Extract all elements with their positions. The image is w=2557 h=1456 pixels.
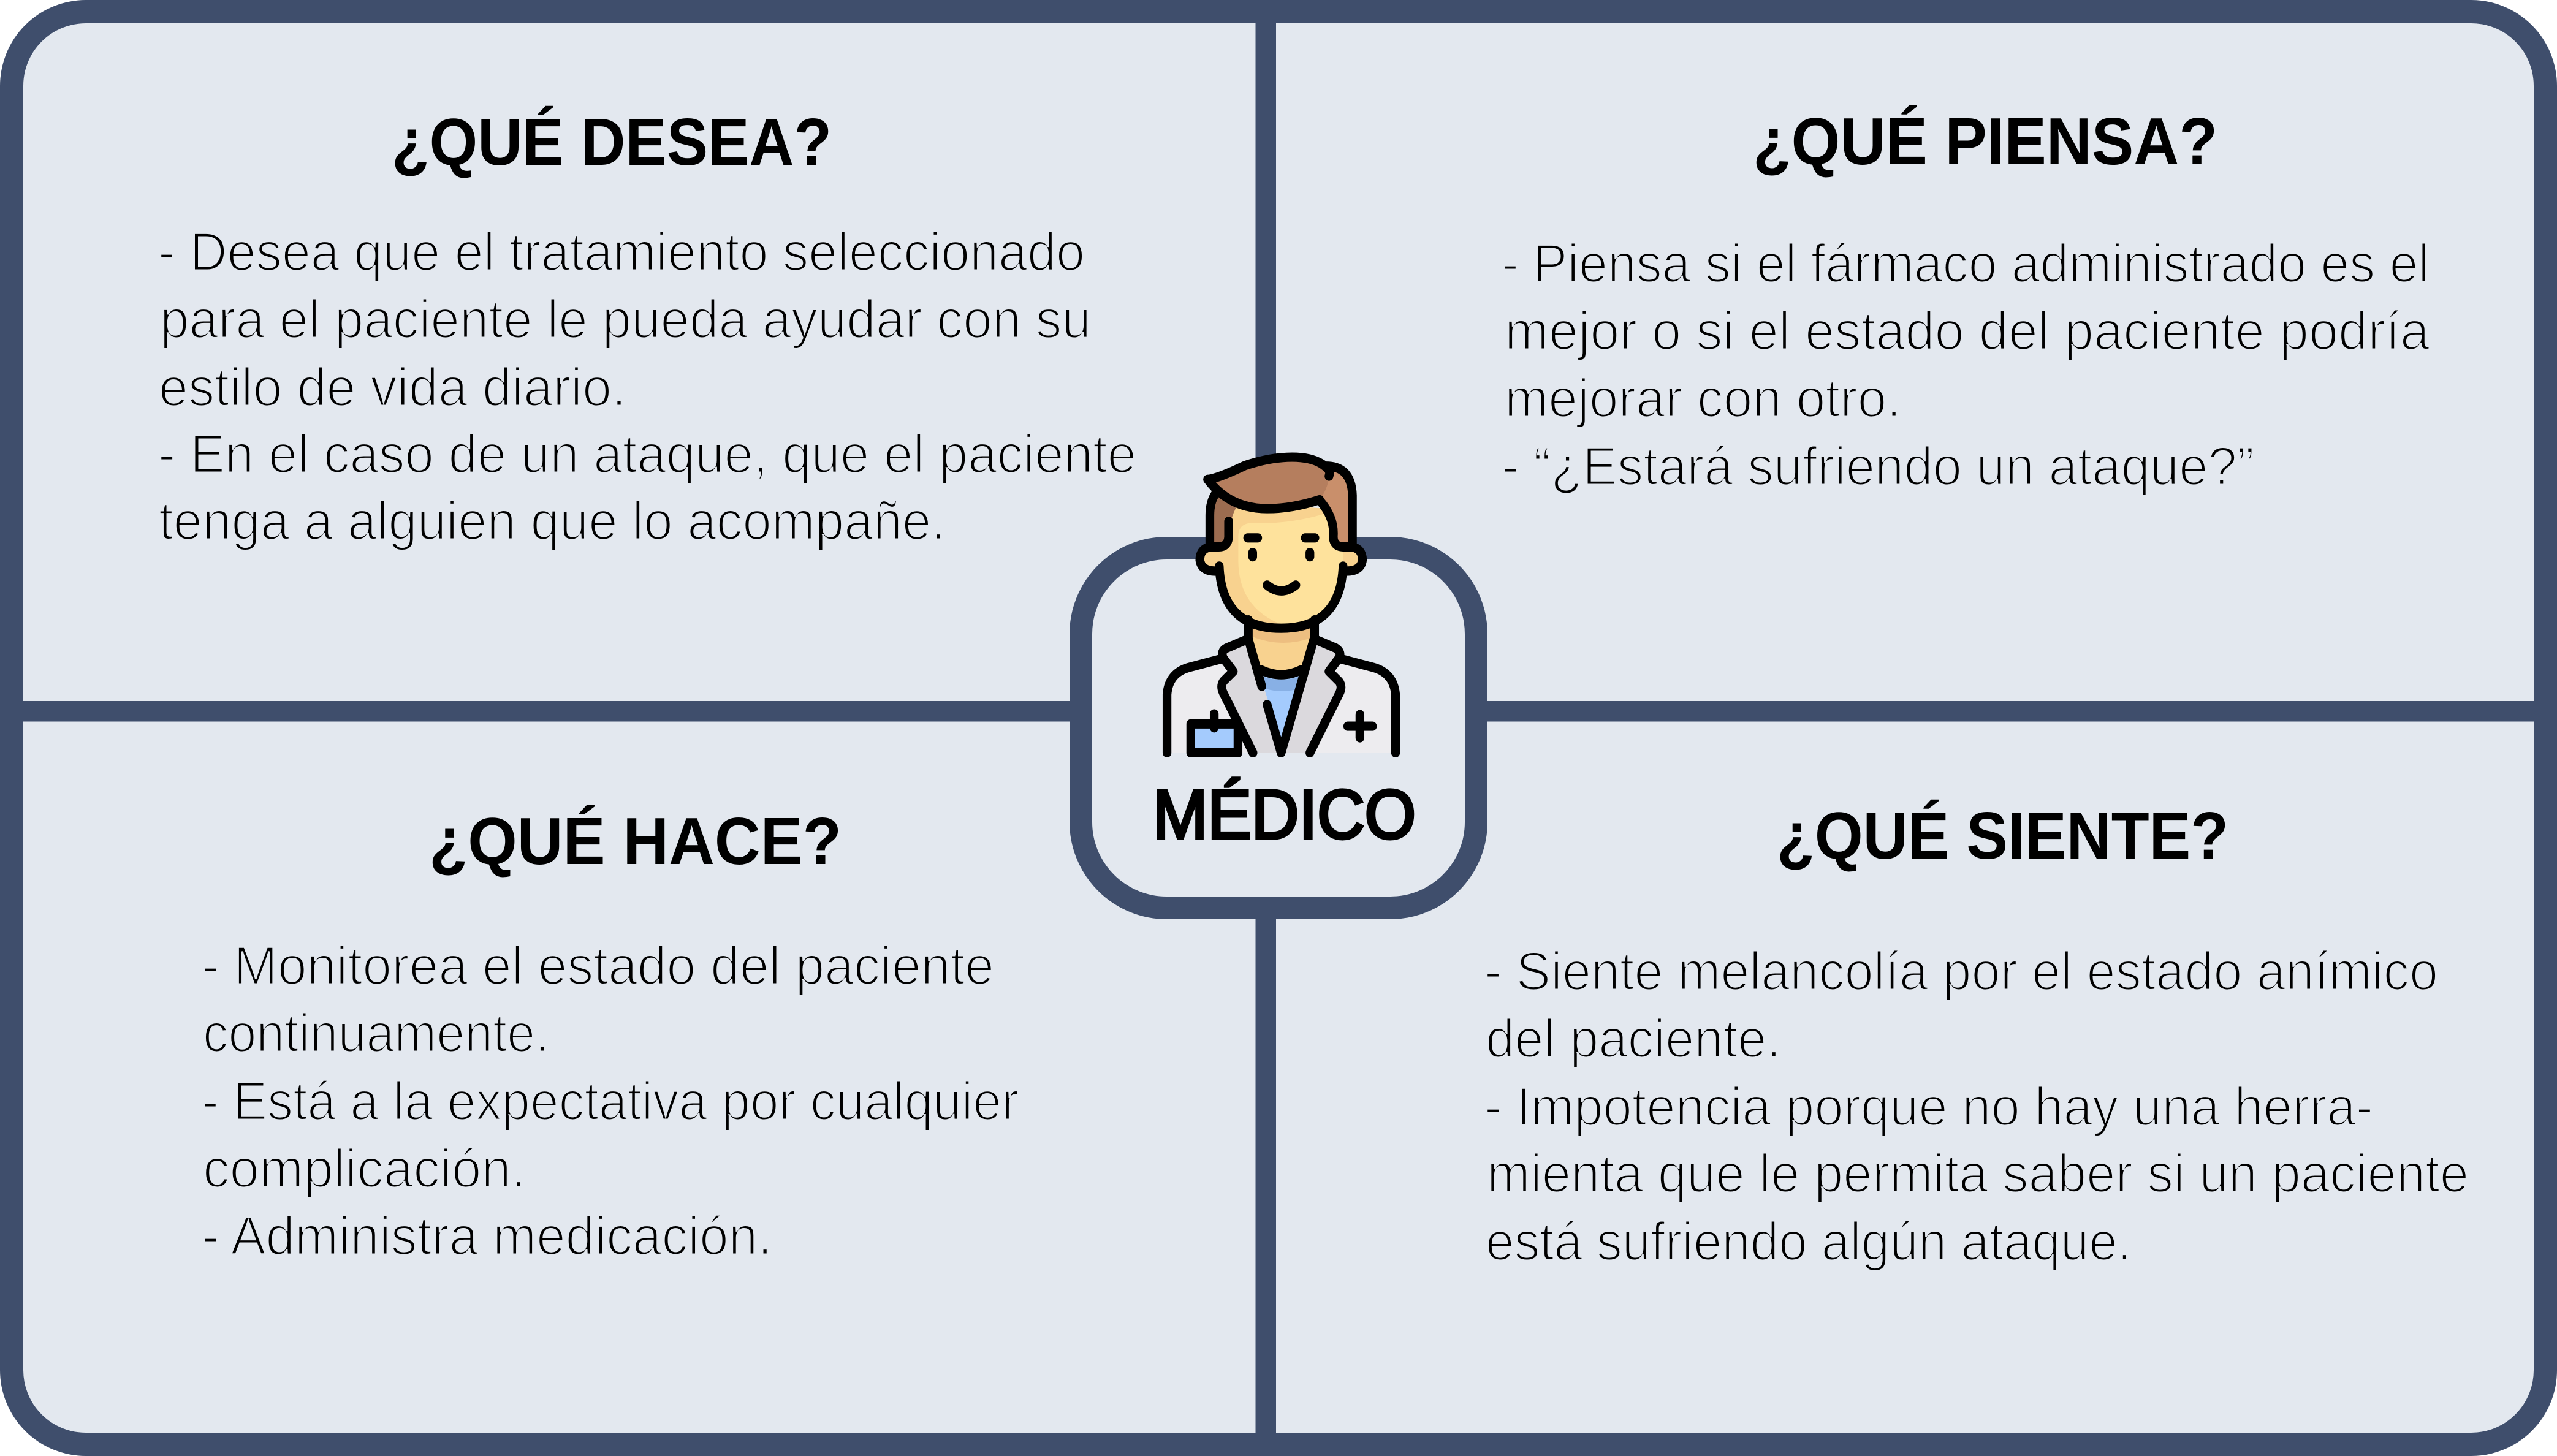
text block: pensamientos: - Piensa si el fármaco administrado es el: [1502, 233, 2430, 294]
coat: [1167, 659, 1396, 753]
heading: ¿Qué desea?: ¿QUÉ DESEA?: [392, 105, 832, 180]
text block: acciones: complicación.: [203, 1138, 526, 1199]
text block: acciones: - Monitorea el estado del paciente: [202, 935, 994, 996]
text block: acciones: continuamente.: [203, 1003, 549, 1063]
panel: ¿Qué desea?: [158, 105, 1136, 551]
text block: acciones: - Administra medicación.: [202, 1205, 772, 1266]
text block: deseos: tenga a alguien que lo acompañe.: [159, 490, 946, 551]
heading: ¿Qué hace?: ¿QUÉ HACE?: [429, 804, 842, 879]
heading: ¿Qué siente?: ¿QUÉ SIENTE?: [1777, 798, 2228, 873]
text block: pensamientos: mejorar con otro.: [1505, 368, 1901, 428]
outlines: [1167, 457, 1396, 753]
text block: sentimientos: - Siente melancolía por el estado anímico: [1484, 941, 2438, 1001]
ears: [1200, 547, 1222, 571]
center badge: médico: [1081, 457, 1476, 908]
face: [1219, 502, 1343, 628]
icon: doctor: [1167, 457, 1396, 753]
text block: acciones: [202, 935, 1019, 1266]
text block: deseos: - En el caso de un ataque, que el paciente: [158, 423, 1136, 484]
text block: sentimientos: está sufriendo algún ataque.: [1486, 1211, 2132, 1272]
text block: pensamientos: [1502, 233, 2430, 496]
text block: sentimientos: [1484, 941, 2469, 1272]
text block: sentimientos: mienta que le permita saber si un paciente: [1487, 1143, 2469, 1204]
label: médico: MÉDICO: [1153, 776, 1416, 853]
text block: deseos: - Desea que el tratamiento seleccionado: [158, 221, 1085, 282]
text block: sentimientos: del paciente.: [1486, 1008, 1781, 1069]
text block: deseos: [158, 221, 1136, 551]
text block: pensamientos: mejor o si el estado del paciente podría: [1505, 300, 2430, 361]
heading: ¿Qué piensa?: ¿QUÉ PIENSA?: [1753, 104, 2217, 179]
hair: [1211, 492, 1237, 547]
text block: acciones: - Está a la expectativa por cualquier: [202, 1071, 1019, 1131]
text block: pensamientos: - “¿Estará sufriendo un ataque?”: [1502, 436, 2254, 496]
panel: ¿Qué piensa?: [1502, 104, 2430, 496]
text block: deseos: estilo de vida diario.: [159, 357, 626, 417]
panel: ¿Qué siente?: [1484, 798, 2469, 1272]
panel: ¿Qué hace?: [202, 804, 1019, 1266]
text block: sentimientos: - Impotencia porque no hay una herra-: [1484, 1076, 2373, 1137]
text block: deseos: para el paciente le pueda ayudar con su: [160, 289, 1091, 349]
